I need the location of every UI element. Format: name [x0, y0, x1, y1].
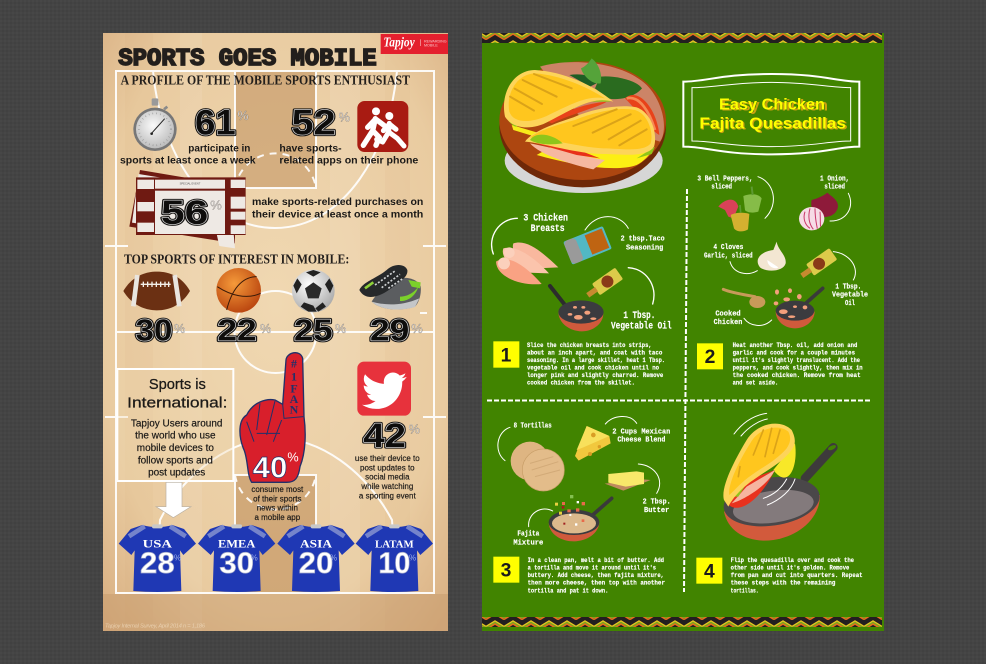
stat: tickets 56 percent: % [210, 198, 222, 212]
step 3 ingredients [498, 417, 671, 547]
stat: 42 percent: social media [365, 473, 410, 482]
sport: running shoe 29 percent [359, 265, 423, 347]
sport: running shoe 29 percent: % [411, 322, 423, 336]
stat: 42 percent: a sporting event [359, 491, 417, 500]
text box: sports is international: mobile devices to [137, 443, 214, 454]
top zigzag border [482, 33, 882, 43]
stat: 61 percent: 61 [195, 104, 236, 143]
title banner: Easy Chicken [721, 97, 828, 114]
title: SPORTS GOES MOBILE [118, 46, 377, 73]
step 1 ingredients: 2 tbsp.Taco [621, 236, 665, 244]
foam finger 40 percent: A [290, 392, 299, 406]
step 2 ingredients: 1 Onion, [820, 176, 849, 184]
step 1 ingredients: 1 Tbsp. [623, 310, 655, 321]
jersey: LATAM 10 percent: % [409, 553, 416, 562]
jersey: EMEA 30 percent [198, 524, 275, 592]
stat: 42 percent: post updates to [360, 463, 415, 472]
step 1 instructions: vegetable oil and cook chicken until no [527, 364, 659, 372]
step 1 ingredients [492, 213, 672, 331]
jersey: LATAM 10 percent: LATAM [375, 540, 414, 551]
sport: basketball 22 percent [216, 268, 271, 347]
title banner [683, 74, 859, 154]
step 3 ingredients: 8 Tortillas [514, 423, 552, 431]
tapjoy logo: MOBILE [424, 43, 438, 47]
foam finger 40 percent: # [291, 357, 297, 371]
foam finger 40 percent [240, 353, 305, 485]
jersey: ASIA 20 percent [277, 524, 355, 592]
step 2 instructions [697, 341, 863, 387]
step 2 ingredients: 3 Bell Peppers, [697, 176, 753, 184]
stat: 42 percent: 42 [363, 417, 406, 455]
sport: running shoe 29 percent: 29 [370, 313, 409, 347]
jersey: USA 28 percent: USA [143, 537, 172, 551]
text: 40 percent caption: a mobile app [254, 513, 301, 522]
bottom zigzag border [482, 617, 882, 627]
stat: 52 percent: have sports- [279, 143, 342, 154]
step 3 instructions: a tortilla and move it around until it's [528, 564, 656, 572]
sport: soccer ball 25 percent: 25 [294, 313, 333, 347]
step 2 ingredients: sliced [824, 184, 845, 192]
stat: 52 percent [279, 104, 419, 166]
step 3 ingredients: Mixture [513, 539, 544, 547]
step 2 instructions: garlic and cook for a couple minutes [733, 349, 855, 357]
sport: basketball 22 percent: 22 [217, 313, 257, 347]
wood court background [103, 33, 448, 631]
stat: 52 percent: related apps on their phone [279, 155, 419, 166]
foam finger 40 percent: 40 [253, 452, 287, 485]
icon: stopwatch [133, 98, 177, 151]
stat: 61 percent: % [237, 109, 249, 123]
step 2 instructions: 2 [705, 347, 715, 368]
step 2 ingredients: Oil [845, 300, 855, 308]
stat: 52 percent: % [339, 110, 350, 124]
heading: top sports: TOP SPORTS OF INTEREST IN MOBILE: [124, 252, 349, 267]
stat: tickets 56 percent: SPECIAL EVENT [180, 182, 201, 186]
jersey: EMEA 30 percent: % [251, 553, 258, 562]
stat: tickets 56 percent: 56 [161, 194, 208, 232]
tapjoy logo [381, 34, 448, 54]
stat: 42 percent: while watching [360, 482, 413, 491]
title banner: Fajita Quesadillas [699, 116, 846, 133]
title banner: Easy Chicken [719, 96, 825, 113]
stat: 42 percent: % [409, 423, 420, 437]
step 1 ingredients: Vegetable Oil [611, 320, 672, 331]
step 3 instructions: 3 [501, 560, 512, 581]
tapjoy logo: Tapjoy [383, 35, 415, 50]
panel: sports goes mobile infographic [103, 33, 448, 631]
jersey: ASIA 20 percent: % [330, 553, 337, 562]
text: 40 percent caption: of their sports [253, 494, 302, 503]
green background [482, 33, 884, 631]
stat: 52 percent: 52 [292, 104, 336, 143]
stat: 42 percent: use their device to [355, 454, 420, 463]
text box: sports is international: post updates [148, 467, 205, 478]
step 4 instructions: from pan and cut into quarters. Repeat [731, 571, 863, 579]
icon: twitter bird [357, 362, 411, 416]
jersey: EMEA 30 percent: 30 [219, 547, 254, 580]
jersey: ASIA 20 percent: 20 [299, 547, 333, 580]
sport: football 30 percent: 30 [136, 313, 172, 347]
step 3 ingredients: Fajita [517, 531, 540, 539]
jersey: USA 28 percent: 28 [140, 547, 175, 580]
illustration: quesadilla plate [499, 58, 666, 193]
text box: sports is international [117, 369, 233, 481]
sport: football 30 percent: 30 [136, 313, 172, 347]
step 2 ingredients [697, 176, 868, 328]
step 4 instructions: other side until it's golden. Remove [731, 564, 849, 572]
step 1 instructions [493, 341, 665, 387]
text box: sports is international: the world who use [135, 431, 216, 442]
step 2 ingredients: 4 Cloves [713, 244, 744, 252]
stat: tickets 56 percent: make sports-related purchases on [252, 197, 423, 208]
step 4 instructions: tortillas. [731, 586, 759, 594]
step 3 ingredients: 2 Tbsp. [643, 498, 671, 506]
panel: easy chicken fajita quesadillas recipe [482, 33, 884, 631]
text: 40 percent caption: news within [257, 504, 298, 513]
step 1 instructions: longer pink and slightly charred. Remove [527, 371, 663, 379]
step 3 ingredients: Butter [644, 507, 670, 515]
sport: basketball 22 percent: % [260, 322, 271, 336]
step 2 ingredients: Garlic, sliced [704, 252, 753, 260]
text box: sports is international: International: [127, 395, 227, 411]
step 2 instructions: Heat another Tbsp. oil, add onion and [733, 341, 857, 349]
step 3 instructions: tortilla and pat it down. [528, 586, 608, 594]
title banner: Fajita Quesadillas [700, 117, 848, 134]
step 2 ingredients: Vegetable [832, 292, 868, 300]
foam finger 40 percent: % [287, 451, 299, 465]
sport: basketball 22 percent: 22 [217, 313, 257, 347]
step 3 ingredients: 2 Cups Mexican [612, 428, 671, 436]
jersey: LATAM 10 percent [356, 524, 433, 592]
text box: sports is international: follow sports and [138, 455, 213, 466]
icon: runners [357, 101, 408, 152]
step 1 ingredients: Breasts [531, 223, 565, 234]
stat: tickets 56 percent: their device at least once a month [252, 209, 423, 220]
sport: soccer ball 25 percent [292, 270, 346, 347]
step 2 ingredients: Chicken [714, 319, 743, 327]
step 1 instructions: cooked chicken from the skillet. [527, 379, 635, 387]
dashed dividers [487, 189, 870, 592]
step 3 ingredients: Cheese Blend [617, 437, 666, 445]
step 3 instructions [493, 556, 665, 594]
source footnote: Tapjoy Internal Survey, April 2014 n = 1,186 [105, 623, 206, 629]
step 1 instructions: Slice the chicken breasts into strips, [527, 341, 652, 349]
stat: 52 percent: 52 [292, 104, 336, 143]
step 2 ingredients: 1 Tbsp. [835, 283, 861, 291]
foam finger 40 percent: 1 [291, 369, 297, 383]
step 1 instructions: about an inch apart, and coat with taco [527, 349, 662, 357]
jersey: USA 28 percent [119, 524, 196, 592]
step 3 instructions: In a clean pan, melt a bit of butter. Add [528, 556, 664, 564]
jersey: LATAM 10 percent: 10 [378, 547, 410, 580]
step 4 instructions: 4 [704, 561, 715, 582]
step 1 instructions: 1 [501, 345, 512, 366]
sport: soccer ball 25 percent: % [335, 322, 346, 336]
step 4 instructions [696, 556, 863, 594]
step 1 ingredients: Seasoning [626, 244, 664, 252]
stat: 61 percent: participate in [188, 143, 250, 154]
step 3 instructions: then more cheese, then top with another [528, 579, 665, 587]
step 2 instructions: the cooked chicken. Remove from heat [733, 371, 861, 379]
step 2 instructions: until it's slightly translucent. Add the [733, 356, 860, 364]
foam finger 40 percent: N [290, 403, 299, 417]
arrow: down to jerseys [156, 482, 191, 518]
jersey: USA 28 percent: % [174, 553, 181, 562]
jersey: ASIA 20 percent: ASIA [300, 537, 332, 551]
subtitle: A PROFILE OF THE MOBILE SPORTS ENTHUSIAST [121, 73, 411, 88]
stat: 42 percent [355, 417, 420, 500]
step 1 instructions: seasoning. In a large skillet, heat 1 Tbsp. [527, 356, 665, 364]
step 4 instructions: these steps with the remaining [731, 579, 835, 587]
step 4 instructions: Flip the quesadilla over and cook the [731, 556, 854, 564]
sport: soccer ball 25 percent: 25 [294, 313, 333, 347]
stat: 61 percent [120, 104, 256, 166]
step 2 ingredients: Cooked [715, 311, 741, 319]
stat: tickets 56 percent [129, 170, 423, 248]
sport: football 30 percent: % [174, 322, 185, 336]
sport: running shoe 29 percent: 29 [370, 313, 409, 347]
stat: tickets 56 percent: 56 [161, 194, 208, 232]
stat: 42 percent: 42 [363, 417, 406, 455]
stat: 61 percent: sports at least once a week [120, 155, 256, 166]
foam finger 40 percent: F [290, 381, 298, 395]
step 2 instructions: and set aside. [733, 379, 778, 387]
step 3 instructions: buttery. Add cheese, then fajita mixture, [528, 571, 664, 579]
sport: football 30 percent [123, 272, 190, 347]
text box: sports is international: Sports is [149, 377, 206, 393]
step 4 illustration: flipping quesadilla [720, 413, 837, 541]
tapjoy logo: REWARDING [424, 39, 447, 43]
step 2 instructions: peppers, and cook slightly, then mix in [733, 364, 863, 372]
text: 40 percent caption: consume most [251, 485, 304, 494]
text box: sports is international: Tapjoy Users around [131, 419, 222, 430]
stat: 61 percent: 61 [195, 104, 236, 143]
text: 40 percent caption [251, 485, 304, 522]
step 2 ingredients: sliced [711, 184, 732, 192]
jersey: EMEA 30 percent: EMEA [218, 537, 256, 551]
step 1 ingredients: 3 Chicken [523, 213, 568, 224]
